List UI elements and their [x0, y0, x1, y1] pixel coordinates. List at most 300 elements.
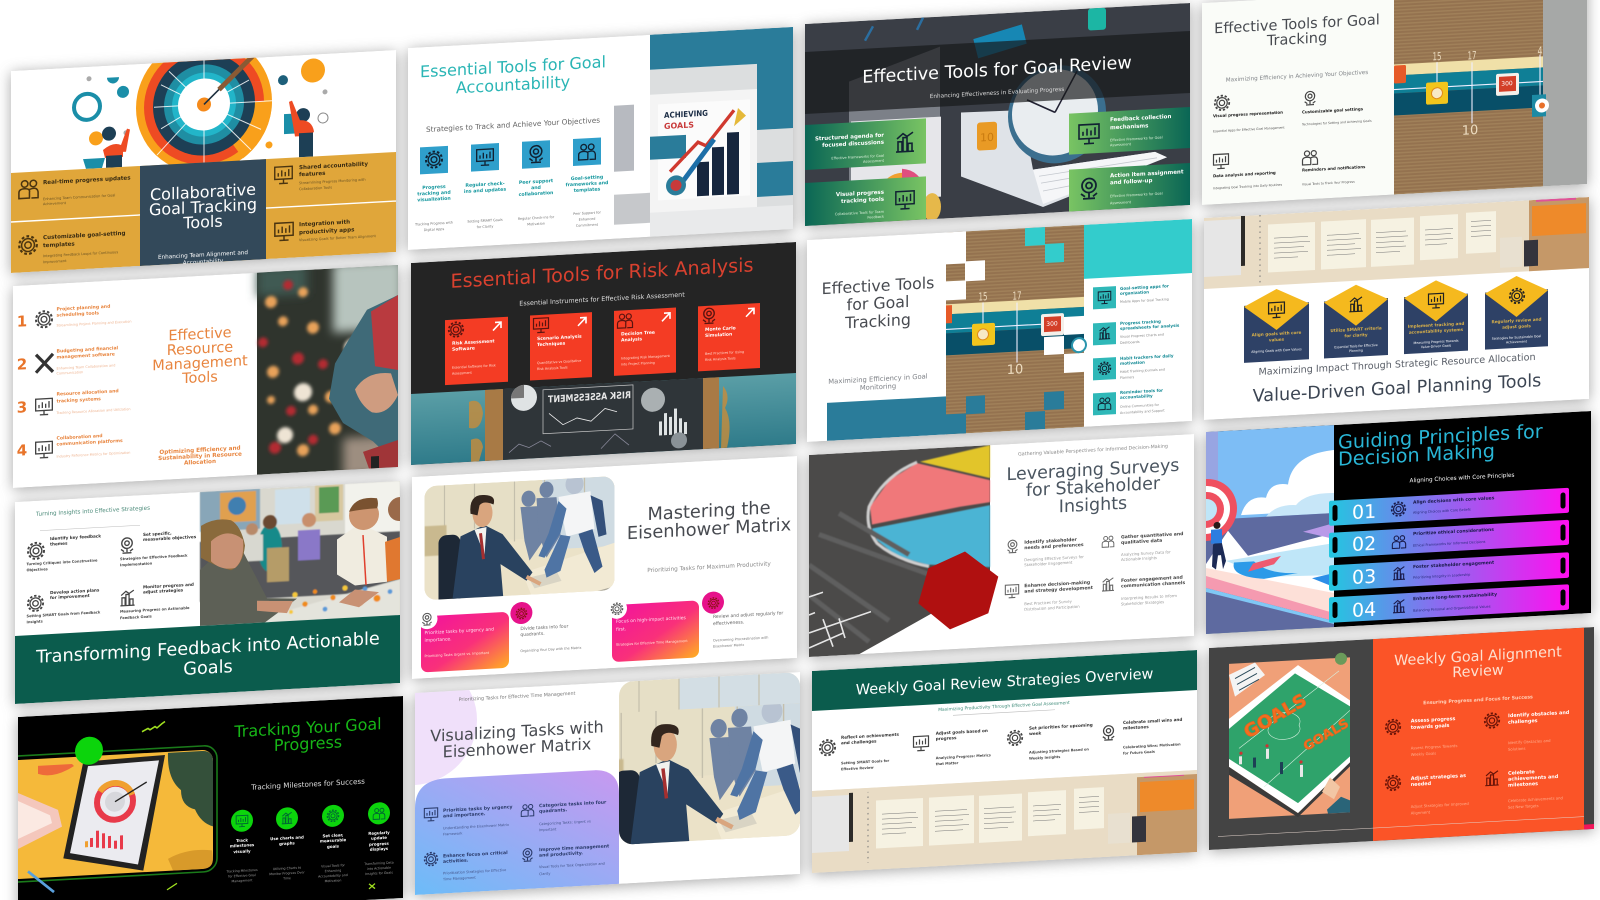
card: tracking and accountability: Measuring Progress Towards [1413, 339, 1459, 345]
card: risk assessment software [445, 317, 508, 385]
item: set priorities [1008, 722, 1093, 762]
row 04: Balancing Personal and Organizational Values [1413, 604, 1491, 613]
item: divide tasks [510, 599, 581, 654]
item: set specific objectives: Strategies for Effective Feedback [120, 554, 188, 561]
subtitle: Maximizing Efficiency in Achieving Your Objectives [1226, 70, 1368, 84]
callout: feedback collection [1069, 107, 1190, 155]
item: celebrate small wins: for Future Goals [1123, 750, 1155, 756]
item: identify obstacles: challenges [1508, 718, 1538, 726]
photo: wooden timeline: 17 [1468, 49, 1477, 63]
title [822, 273, 934, 334]
item: develop action plans: Insights [26, 619, 43, 624]
callout: action item assignment: and follow-up [1110, 178, 1152, 186]
item: adjust goals [914, 728, 991, 767]
illustration: people and decorations [74, 58, 328, 170]
step 1: visually [233, 848, 251, 854]
item: foster engagement: Stakeholder Strategies [1121, 599, 1164, 606]
item: set specific objectives: Set specific, [143, 530, 172, 537]
item: visual progress representation: Visual progress representation [1213, 110, 1283, 118]
item: customizable goal-setting templates [19, 231, 126, 266]
dark title band [805, 31, 1190, 114]
item: assess progress: Weekly Goals [1411, 751, 1436, 757]
card: monte carlo simulation: Simulation [705, 331, 732, 339]
item 1: 1 [17, 312, 27, 331]
photo: person by christmas tree [257, 259, 403, 483]
item: integration with productivity apps: productivity apps [299, 227, 355, 236]
item 4: 4 [17, 441, 27, 460]
card: smart criteria: for clarity [1344, 332, 1368, 338]
item: shared accountability features: Collaboration Tools [299, 185, 332, 191]
item: peer support: Peer support [519, 178, 554, 186]
item: goal-setting apps [1093, 283, 1169, 309]
item: identify stakeholder needs: Designing Effective Surveys for [1024, 554, 1084, 562]
panel: Weekly Goal Alignment Review [1209, 627, 1594, 850]
item 2: Budgeting and financial [56, 345, 119, 355]
item: reflect on achievements: Reflect on achievements [841, 732, 900, 740]
callout: action item assignment: Effective Frameworks for Goal [1110, 192, 1163, 198]
item: adjust strategies: Adjust Strategies for Improved [1411, 801, 1469, 809]
title [1338, 420, 1543, 471]
callout: feedback collection: Feedback collection [1110, 114, 1171, 123]
photo: clock, laptop and notebook: 10 [980, 131, 994, 144]
item: set specific objectives: Implementation [120, 562, 153, 567]
item: identify obstacles: Identify Obstacles and [1508, 738, 1551, 745]
card: scenario analysis techniques [530, 312, 592, 381]
step 1: for Effective Goal [228, 873, 256, 879]
step 2 [269, 806, 305, 881]
title band [15, 615, 400, 704]
subtitle: Tracking Milestones for Success [250, 777, 365, 792]
item: monitor progress: Measuring Progress on Actionable [120, 606, 190, 614]
subtitle: Strategies to Track and Achieve Your Objectives [426, 116, 600, 134]
item: review and adjust: Overcoming Procrastination with [713, 636, 768, 643]
item: progress tracking: Tracking Progress with [414, 221, 453, 227]
callout: structured agenda: focused discussions [822, 140, 885, 149]
item: integration with productivity apps [274, 219, 376, 242]
band: lower left teal [827, 396, 946, 441]
item: celebrate small wins [1103, 717, 1182, 757]
subtitle: Prioritizing Tasks for Effective Time Management [459, 691, 575, 703]
title: Progress [274, 732, 342, 755]
title: Review [1452, 662, 1504, 681]
card: decision tree analysis: into Project Planning [621, 361, 655, 367]
subtitle: Maximizing Productivity Through Effective Goal Assessment [938, 700, 1070, 713]
title [154, 327, 248, 383]
illustration: goals football pitch: GOALS [1301, 716, 1352, 755]
title: Guiding Principles for [1338, 420, 1543, 454]
step 1 [225, 809, 258, 884]
item: enhance focus: activities. [443, 858, 469, 865]
item 2: management software [56, 351, 115, 361]
card: decision tree analysis [614, 308, 676, 376]
item: identify key feedback themes: Objectives [26, 567, 48, 572]
item: adjust goals: progress [936, 735, 957, 741]
subtitle: Optimizing Efficiency and [159, 446, 241, 456]
item: enhance decision-making: Distribution and Participation [1024, 604, 1080, 612]
image: man and robots at desks [619, 673, 800, 844]
item: celebrate achievements: milestones [1508, 781, 1538, 789]
photo: wooden timeline: 10 [1462, 123, 1478, 139]
card: monte carlo simulation [698, 303, 760, 371]
item: improve time management: Clarity [539, 872, 550, 876]
row 03: Prioritizing Integrity in Leadership [1413, 573, 1470, 580]
item: review and adjust: Review and adjust regularly for [713, 610, 783, 620]
item: regular check-ins: for Clarity [477, 224, 493, 229]
title: Leveraging Surveys [1007, 456, 1179, 485]
item 2 [17, 345, 119, 378]
subtitle: Prioritizing Tasks for Maximum Productivity [647, 561, 771, 574]
title band: Goals [183, 657, 233, 680]
step 3: goals [327, 843, 340, 849]
item: prioritize tasks: Prioritize tasks by urgency [443, 804, 513, 814]
item: categorize tasks: Categorize tasks into four [539, 800, 607, 809]
item: identify key feedback themes [26, 533, 101, 572]
item: set specific objectives: measurable objectives [143, 534, 197, 542]
item: develop action plans [26, 587, 101, 624]
callout: feedback collection: Assessment [1110, 142, 1132, 147]
item: peer support: Motivation [527, 222, 545, 227]
callout: structured agenda: Effective Frameworks for Goal [831, 154, 884, 161]
item: categorize tasks [521, 800, 607, 833]
illustration: game board with target [1175, 425, 1334, 636]
card: prioritize tasks: Prioritize tasks by urgency and [424, 627, 494, 636]
photo: wooden timeline with checker squares [946, 225, 1086, 434]
panel: Leveraging Surveys for Stakeholder Insights [809, 434, 1194, 657]
item: develop action plans: Setting SMART Goals from Feedback [26, 610, 101, 618]
item: shared accountability features [275, 162, 368, 193]
card: scenario analysis techniques: Risk Analysis Tools [537, 365, 568, 371]
item 4 [17, 432, 130, 461]
item: peer support [518, 140, 555, 227]
card: tracking and accountability: Value-Driven Goals [1421, 344, 1452, 349]
item: reminders and notifications [1302, 148, 1366, 187]
item: integration with productivity apps: Integration with [299, 220, 350, 228]
panel: central title block: Collaborative [150, 180, 256, 204]
title: Resource [167, 340, 233, 359]
callout: feedback collection: mechanisms [1110, 123, 1149, 131]
item: categorize tasks: quadrants. [539, 807, 567, 815]
item: goal-setting frameworks: Commitment [576, 223, 599, 228]
item: identify obstacles [1485, 709, 1570, 753]
icon: red hexagon [918, 550, 998, 631]
item: set specific objectives [120, 529, 197, 567]
item 4: Industry Reference Metrics for Optimization [56, 451, 130, 459]
item: foster engagement: Foster engagement and [1121, 575, 1183, 584]
item: adjust goals: Analyzing Progress: Metrics [936, 753, 991, 760]
item: celebrate small wins: Celebrating Wins: Motivation [1123, 742, 1181, 750]
step 4: update [371, 835, 387, 841]
item 4: Collaboration and [56, 433, 103, 442]
item 1 [17, 303, 132, 331]
row 01: 01 [1352, 501, 1376, 524]
title: Weekly Goal Alignment [1394, 644, 1562, 669]
title band: Weekly Goal Review Strategies Overview [856, 666, 1154, 699]
item: habit trackers: Planners [1120, 375, 1134, 380]
card: prioritize tasks: importance. [424, 636, 452, 644]
item: foster engagement: communication channels [1121, 580, 1185, 589]
title: Visualizing Tasks with [430, 717, 604, 746]
step 3: Accountability and [318, 873, 348, 879]
item: habit trackers: motivation [1120, 360, 1145, 366]
item: develop action plans: Develop action plans [50, 587, 100, 595]
item: progress tracking: Progress [422, 184, 446, 191]
item 3: tracking systems [56, 396, 101, 405]
title: Effective Tools [822, 273, 934, 298]
item: customizable goal-setting templates: Improvement [43, 259, 67, 264]
photo: clock, laptop and notebook [849, 4, 1167, 226]
title band: Transforming Feedback into Actionable [35, 629, 380, 668]
item: gather quantitative data: qualitative data [1121, 538, 1162, 546]
item: customizable goal settings [1302, 90, 1372, 126]
item 2: 2 [17, 355, 27, 374]
photo: sticky notes wall [1204, 197, 1589, 289]
item: shared accountability features: Shared accountability [299, 162, 368, 171]
item: identify stakeholder needs [1008, 536, 1084, 568]
panel: Visualizing Tasks with Eisenhower Matrix [353, 638, 830, 898]
item: review and adjust: Eisenhower Matrix [713, 643, 744, 649]
title: Value-Driven Goal Planning Tools [1253, 371, 1541, 407]
card: tracking and accountability [1404, 279, 1468, 354]
panel: Effective Resource Management Tools [13, 259, 403, 496]
photo: chalk pie chart [809, 445, 990, 657]
photo: wooden timeline with checker squares: 10 [1007, 362, 1023, 378]
item: gather quantitative data: Analyzing Survey Data for [1121, 549, 1171, 557]
item: set priorities: Adjusting Strategies Based on [1029, 747, 1089, 755]
item: enhance decision-making: Best Practices for Survey [1024, 599, 1073, 606]
decoration: squiggle [142, 721, 165, 732]
item: assess progress [1386, 716, 1457, 758]
illustration: target with dart [136, 58, 272, 164]
item: goal-setting apps: Goal-setting apps for [1120, 283, 1169, 291]
panel: Weekly Goal Review Strategies Overview [812, 650, 1197, 874]
card: align goals: values [1269, 337, 1285, 342]
subtitle: Gathering Valuable Perspectives for Informed Decision-Making [1018, 443, 1168, 458]
card: regularly review: Strategies for Sustainable Goal [1492, 334, 1541, 341]
item: progress tracking spreadsheets: spreadsheets for analysis [1120, 323, 1180, 331]
title: Mastering the [647, 497, 771, 525]
subtitle: Maximizing Impact Through Strategic Resource Allocation [1258, 352, 1536, 378]
callout: feedback collection: Effective Frameworks for Goal [1110, 136, 1163, 142]
step 3: Motivation [325, 878, 341, 883]
panel: central title block: Accountability [183, 258, 224, 267]
panel: Collaborative Goal Tracking Tools [11, 50, 396, 273]
card: risk assessment software: Risk Assessment [452, 338, 495, 347]
item: gather quantitative data [1102, 531, 1183, 563]
image: chalkboard risk assessment [411, 370, 796, 465]
item: enhance focus: Time Management [442, 876, 476, 882]
card: decision tree analysis: Integrating Risk Management [621, 354, 671, 361]
item 3 [17, 388, 131, 417]
item: shared accountability features: Streamlining Progress Monitoring with [299, 178, 366, 185]
step 3: Visual Tools for [321, 863, 346, 868]
item: data analysis and reporting [1213, 151, 1282, 190]
item: divide tasks: Divide tasks into four [520, 623, 569, 632]
callout: visual progress tracking tools: Feedback [867, 215, 885, 220]
title [430, 717, 604, 762]
item: enhance decision-making: and strategy development [1024, 585, 1094, 595]
card: align goals [1244, 287, 1309, 363]
item: reminder tools: Accountability and Support [1120, 408, 1165, 415]
title: Essential Tools for Goal [420, 52, 606, 81]
subtitle: Sustainability in Resource [158, 452, 242, 462]
item: divide tasks: Organizing Your Day with the Matrix [520, 646, 581, 653]
item: foster engagement [1102, 574, 1185, 608]
card: focus on high-impact: first. [616, 626, 626, 633]
item 4: communication platforms [56, 438, 123, 448]
item: identify stakeholder needs: Stakeholder Engagement [1024, 560, 1073, 567]
band: upper right teal [1084, 219, 1192, 279]
item: goal-setting frameworks: Goal-setting [571, 174, 603, 182]
item: data analysis and reporting: Integrating Goal Tracking into Daily Routines [1213, 183, 1282, 190]
card: monte carlo simulation: Risk Analysis Tools [705, 356, 736, 362]
item: set priorities: week [1029, 730, 1042, 736]
item: enhance decision-making [1005, 579, 1094, 613]
item: regular check-ins [464, 143, 506, 230]
item: peer support: Regular Check-ins for [518, 215, 555, 221]
card: risk assessment software: Software [452, 346, 475, 353]
step 1: Management [232, 878, 253, 883]
item: gather quantitative data: Actionable Insights [1121, 555, 1157, 562]
card: focus on high-impact: Strategies for Effective Time Management [616, 639, 688, 647]
step 1: Tracking Milestones [225, 868, 258, 874]
step 3: Set clear, [323, 832, 344, 838]
panel: gradient task panel [415, 769, 619, 895]
item: improve time management: Improve time management [539, 843, 610, 853]
item: customizable goal settings: Customizable goal settings [1302, 106, 1364, 115]
step 3: Enhancing [325, 868, 341, 873]
step 2: Utilizing Charts to [273, 866, 301, 871]
item: goal-setting frameworks [566, 137, 608, 228]
card: align goals: Align goals with core [1252, 330, 1301, 337]
card: smart criteria: Essential Tools for Effective [1334, 343, 1378, 349]
card: focus on high-impact [607, 594, 699, 662]
item: prioritize tasks: Understanding the Eisenhower Matrix [443, 823, 509, 830]
panel: Effective Tools for Goal Tracking (timeline) [807, 219, 1192, 442]
item: identify stakeholder needs: needs and preferences [1024, 542, 1084, 551]
image: chalkboard risk assessment: RISK ASSESSMENT [548, 390, 631, 406]
panel: Essential Tools for Risk Analysis [411, 242, 796, 465]
item: customizable goal settings: Technologies for Setting and Achieving Goals [1301, 119, 1372, 127]
item: identify obstacles: Identify obstacles and [1508, 710, 1570, 719]
illustration: goals football pitch [1229, 652, 1352, 821]
card: scenario analysis techniques: Scenario Analysis [537, 334, 582, 342]
item: reflect on achievements [820, 732, 900, 773]
photo: wooden timeline with checker squares: 300 [1046, 320, 1058, 328]
item: celebrate achievements: Set New Targets [1508, 803, 1539, 810]
item: identify key feedback themes: themes [50, 541, 68, 547]
subtitle: Ensuring Progress and Focus for Success [1423, 694, 1533, 706]
item: adjust goals: that Matter [936, 761, 959, 766]
item: data analysis and reporting: Data analysis and reporting [1213, 170, 1276, 178]
row 02: Prioritize ethical considerations [1413, 527, 1494, 537]
step 2: graphs [279, 840, 295, 846]
card: smart criteria: Planning [1349, 348, 1363, 353]
item: improve time management: Visual Tools for Task Organization and [539, 862, 605, 869]
item: set priorities: Weekly Insights [1029, 755, 1060, 761]
callout: action item assignment: Action item assignment [1110, 169, 1184, 179]
item: identify stakeholder needs: Identify stakeholder [1024, 537, 1077, 546]
item: real-time progress updates: Real-time progress updates [43, 175, 131, 186]
item: real-time progress updates: Achievement [43, 201, 67, 206]
item: prioritize tasks: and importance. [443, 811, 486, 819]
panel: central title block [140, 159, 266, 269]
icon: green dot [75, 736, 103, 765]
item: regular check-ins: ins and updates [464, 187, 506, 195]
subtitle: Essential Instruments for Effective Risk Assessment [519, 291, 685, 308]
item: identify key feedback themes: Identify key feedback [50, 533, 101, 541]
title: Essential Tools for Risk Analysis [451, 253, 753, 293]
item 1: Project planning and [56, 304, 110, 313]
title [422, 55, 604, 94]
item: peer support: and [531, 185, 541, 191]
step 4: Insights for Goals [365, 871, 393, 876]
row 04: Enhance long-term sustainability [1413, 592, 1497, 602]
row 01 [1329, 488, 1569, 526]
step 3: measurable [320, 837, 346, 844]
row 01: Aligning Choices with Core Beliefs [1413, 508, 1471, 515]
callout: structured agenda [805, 118, 926, 170]
step 3 [318, 804, 348, 884]
card: decision tree analysis: Decision Tree [621, 330, 655, 338]
item: goal-setting frameworks: Peer Support for [573, 210, 601, 216]
photo: wooden timeline: 300 [1501, 80, 1513, 88]
title [1394, 644, 1562, 684]
card: decision tree analysis: Analysis [621, 336, 642, 344]
item: adjust strategies: Alignment [1411, 809, 1431, 816]
item: goal-setting frameworks: frameworks and [566, 180, 608, 188]
item 3: 3 [17, 398, 27, 417]
title: for Goal [847, 292, 909, 314]
step 4: into Actionable [367, 866, 391, 871]
panel: central title block: Goal Tracking [149, 195, 257, 219]
photo: gallery room with poster: ACHIEVING [664, 109, 708, 120]
item: gather quantitative data: Gather quantitative and [1121, 531, 1183, 540]
card: focus on high-impact: Focus on high-impact activities [616, 615, 687, 625]
image: tablet with gauge [6, 745, 217, 895]
card: smart criteria: Utilize SMART criteria [1330, 325, 1382, 333]
item 3: Tracking Resource Allocation and Utilization [56, 407, 131, 415]
item: reminder tools: accountability [1120, 393, 1153, 400]
decoration: lavender circle [353, 658, 477, 788]
card: scenario analysis techniques: Techniques [537, 341, 566, 348]
photo: wooden timeline: 4 [1538, 44, 1543, 58]
card: risk assessment software: Assessment [452, 371, 472, 376]
callout: visual progress tracking tools: Collaborative Tools for Team [835, 210, 885, 216]
item 3: Resource allocation and [56, 388, 119, 398]
panel: Effective Tools for Goal Review [805, 3, 1190, 228]
row 03 [1329, 552, 1569, 591]
photo: wooden timeline with checker squares: 15 [978, 290, 988, 304]
panel: Value-Driven Goal Planning Tools [1204, 185, 1589, 420]
title [627, 496, 791, 544]
item: visual progress representation [1213, 92, 1285, 133]
item: categorize tasks: Important [539, 827, 557, 832]
subtitle: Maximizing Efficiency in Goal [828, 372, 928, 386]
item: celebrate small wins: milestones [1123, 724, 1149, 731]
item 2: Communication [56, 370, 83, 376]
item 2: Enhancing Team Collaboration and [56, 363, 115, 371]
item: set priorities: Set priorities for upcoming [1029, 722, 1093, 731]
row 02: 02 [1352, 533, 1376, 556]
item: adjust strategies: Adjust strategies as [1411, 773, 1466, 782]
step 4: progress [369, 841, 390, 847]
item: customizable goal-setting templates: Integrating Feedback Loops for Continuous [43, 250, 118, 258]
title [233, 714, 382, 757]
row 02 [1329, 520, 1569, 558]
item: enhance focus: Prioritization Strategies for Effective [443, 868, 506, 875]
item: develop action plans: for improvement [50, 593, 90, 600]
title: Effective Tools for Goal [1214, 12, 1380, 37]
